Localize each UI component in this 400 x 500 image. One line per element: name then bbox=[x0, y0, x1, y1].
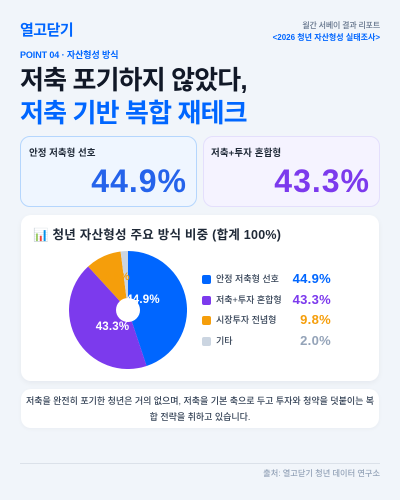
report info: <2026 청년 자산형성 실태조사> bbox=[273, 33, 380, 42]
title: 저축 기반 복합 재테크 bbox=[20, 98, 247, 128]
title: 저축 포기하지 않았다, bbox=[20, 65, 247, 95]
stat card: mixed bbox=[203, 136, 380, 207]
stat card: stable savings bbox=[20, 136, 197, 207]
legend swatch: market bbox=[202, 316, 211, 325]
stat value: 43.3% bbox=[274, 163, 370, 199]
stat label: 저축+투자 혼합형 bbox=[211, 148, 281, 159]
stat value: 44.9% bbox=[91, 163, 187, 199]
legend swatch: other bbox=[202, 337, 211, 346]
legend swatch: stable bbox=[202, 275, 211, 284]
summary box bbox=[21, 389, 379, 428]
legend label: stable: 안정 저축형 선호 bbox=[216, 274, 279, 284]
legend swatch: mixed bbox=[202, 296, 211, 305]
legend bbox=[202, 271, 331, 348]
legend label: mixed: 저축+투자 혼합형 bbox=[216, 295, 282, 305]
legend value: other: 2.0% bbox=[300, 333, 331, 348]
summary box: 합 전략을 취하고 있습니다. bbox=[150, 412, 250, 422]
point label: POINT 04 · 자산형성 방식 bbox=[20, 50, 118, 60]
legend value: mixed: 43.3% bbox=[293, 292, 331, 307]
source: 출처: 열고닫기 청년 데이터 연구소 bbox=[263, 469, 380, 478]
report info bbox=[272, 21, 380, 42]
chart panel bbox=[21, 215, 379, 381]
pie chart: 43.3% bbox=[96, 321, 129, 333]
legend label: market: 시장투자 전념형 bbox=[216, 315, 276, 325]
legend value: market: 9.8% bbox=[300, 312, 331, 327]
logo: 열고닫기 bbox=[20, 22, 73, 39]
legend label: other: 기타 bbox=[216, 336, 233, 346]
pie chart bbox=[69, 251, 187, 369]
report info: 월간 서베이 결과 리포트 bbox=[302, 21, 380, 30]
pie chart: 9.8% bbox=[104, 271, 130, 283]
chart heading: 📊 청년 자산형성 주요 방식 비중 (합계 100%) bbox=[33, 228, 281, 242]
legend value: stable: 44.9% bbox=[293, 271, 331, 286]
summary box: 저축을 완전히 포기한 청년은 거의 없으며, 저축을 기본 축으로 두고 투자와 청약을 덧붙이는 복 bbox=[26, 396, 374, 406]
pie chart: 44.9% bbox=[126, 294, 160, 306]
stat label: 안정 저축형 선호 bbox=[29, 148, 95, 159]
title bbox=[20, 65, 247, 128]
